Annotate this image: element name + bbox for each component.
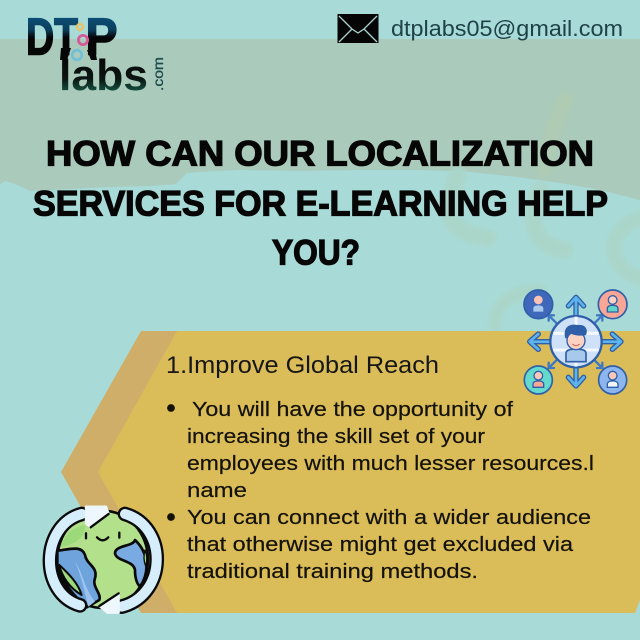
centre globe with person xyxy=(550,316,602,367)
panel: gold arrow-shaped card xyxy=(61,331,640,613)
title xyxy=(33,134,608,272)
satellite: bottom-left person xyxy=(524,366,552,394)
bullet 1: employees with much lesser resources.l xyxy=(187,452,594,475)
face xyxy=(86,533,119,540)
email address: dtplabs05@gmail.com xyxy=(391,16,623,41)
bullet 2: traditional training methods. xyxy=(187,560,478,583)
bullet 1: name xyxy=(187,479,247,502)
title: HOW CAN OUR LOCALIZATION xyxy=(46,134,594,174)
bullet 1 xyxy=(167,398,594,502)
continents and oceans xyxy=(57,525,147,607)
background: faint brush marks xyxy=(449,100,640,325)
bullet 1: increasing the skill set of your xyxy=(187,425,485,448)
title: SERVICES FOR E-LEARNING HELP xyxy=(33,184,608,224)
bullet 2: You can connect with a wider audience xyxy=(187,506,591,529)
circular arrows xyxy=(50,514,157,607)
logo: DTP labs xyxy=(26,8,166,100)
bullet list xyxy=(167,398,594,583)
logo: DTP labs: .com xyxy=(150,57,166,91)
bullet 1: You will have the opportunity of xyxy=(192,398,513,421)
background: torn sage band xyxy=(0,39,640,200)
logo: DTP labs: P xyxy=(86,8,118,66)
arrows xyxy=(530,297,621,386)
bullet 2: that otherwise might get excluded via xyxy=(187,533,574,556)
arrowheads xyxy=(86,507,119,613)
panel heading: 1.Improve Global Reach xyxy=(166,352,439,379)
satellite: top-right person xyxy=(598,290,627,319)
earth xyxy=(57,511,148,608)
satellite: top-left person xyxy=(524,290,553,319)
logo: DTP labs: labs xyxy=(59,51,148,100)
icon: envelope xyxy=(338,14,378,43)
icon: smiling earth with circular arrows xyxy=(50,507,157,613)
satellite: bottom-right person xyxy=(599,366,627,394)
logo: DTP labs: DT xyxy=(26,8,78,66)
icon: global network of people xyxy=(524,290,627,394)
title: YOU? xyxy=(272,234,360,272)
bullet 2 xyxy=(167,506,591,583)
